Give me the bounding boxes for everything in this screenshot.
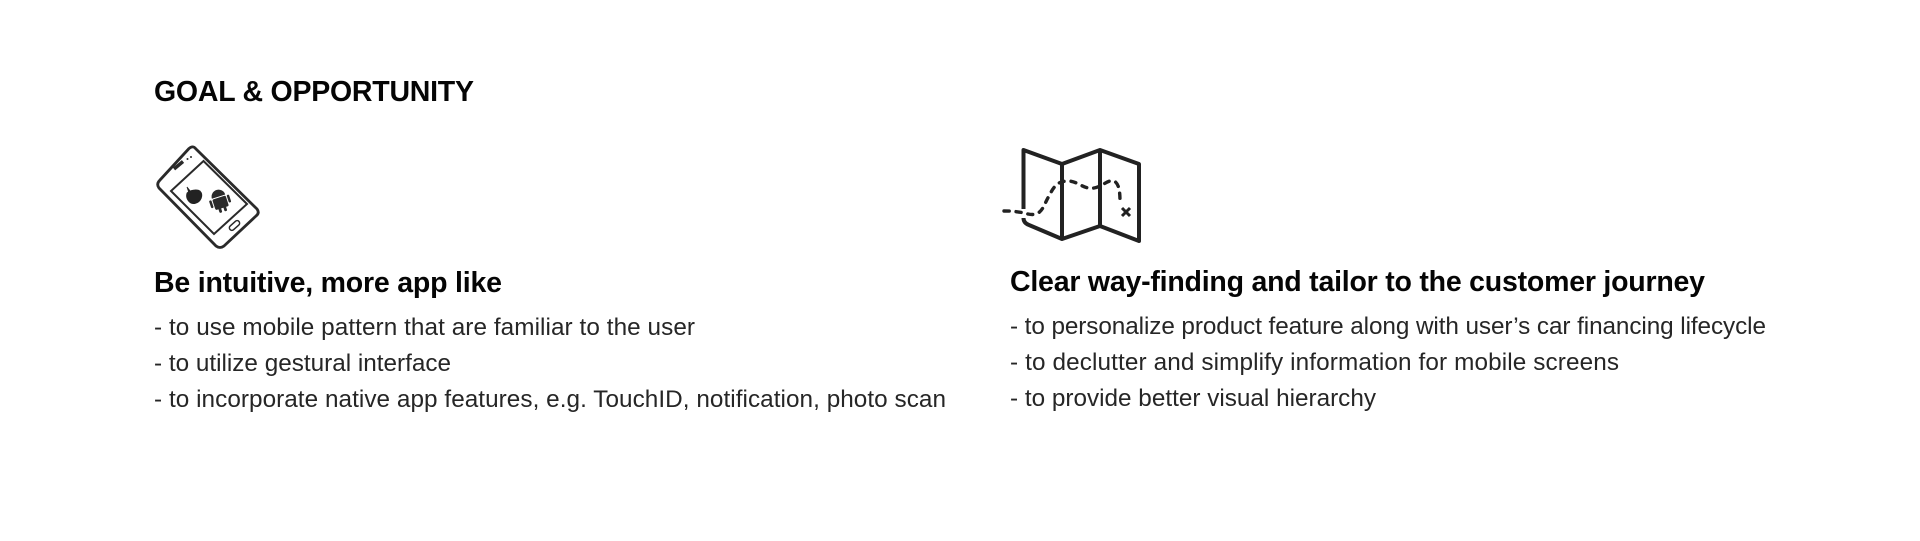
icon: smartphone with apple and android logos	[158, 147, 258, 248]
bullet list	[154, 314, 946, 413]
bullet list: - to provide better visual hierarchy	[1010, 385, 1377, 412]
bullet list: - to personalize product feature along with user’s car financing lifecycle	[1010, 313, 1766, 340]
title: GOAL & OPPORTUNITY	[154, 76, 474, 108]
icon: apple logo	[187, 187, 202, 204]
panel: be intuitive	[154, 147, 946, 413]
bullet list: - to declutter and simplify information for mobile screens	[1010, 349, 1619, 376]
heading: Clear way-finding and tailor to the customer journey	[1010, 266, 1705, 298]
panel: clear way-finding	[1004, 150, 1766, 412]
bullet list: - to utilize gestural interface	[154, 350, 451, 377]
heading: Be intuitive, more app like	[154, 267, 502, 299]
bullet list: - to incorporate native app features, e.g. TouchID, notification, photo scan	[154, 386, 946, 413]
bullet list	[1010, 313, 1766, 412]
bullet list: - to use mobile pattern that are familiar to the user	[154, 314, 695, 341]
icon: folded map with dashed route	[1004, 150, 1139, 241]
icon: android logo	[206, 187, 234, 215]
